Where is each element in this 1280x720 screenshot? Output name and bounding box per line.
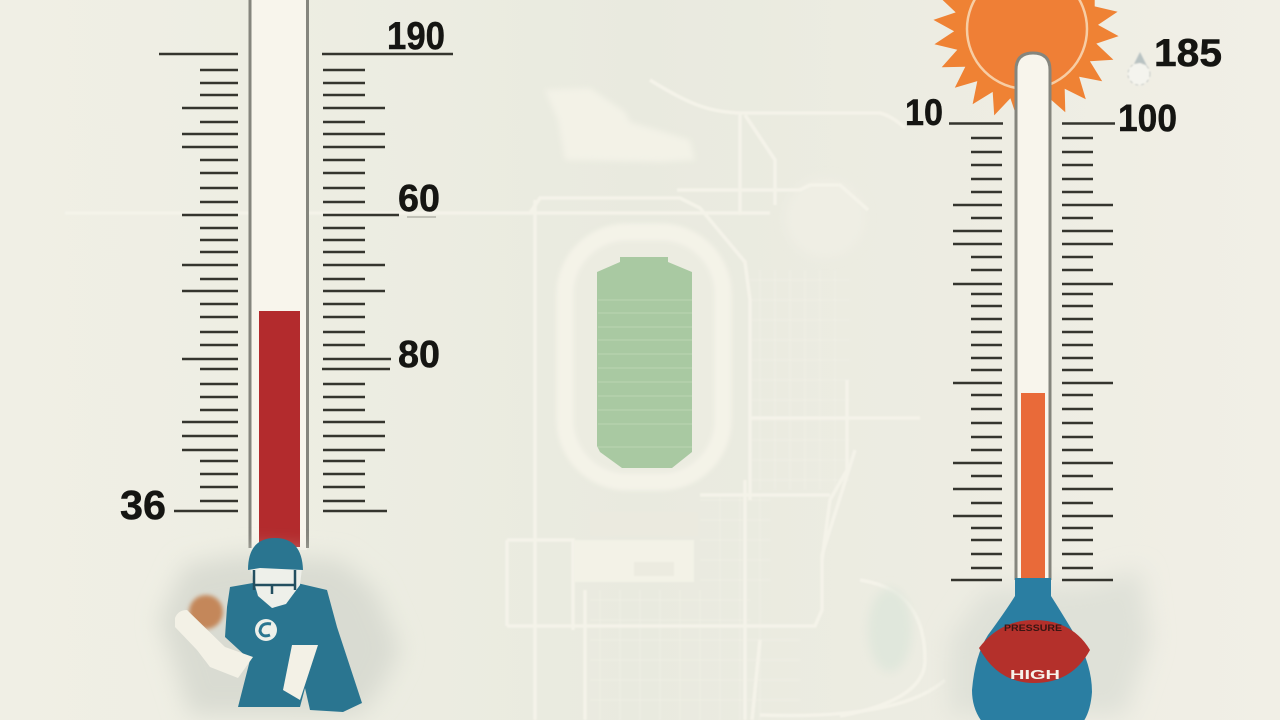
label: 185: 185 <box>1154 32 1222 75</box>
sun disc <box>967 0 1087 89</box>
smudge behind player <box>160 555 400 715</box>
left red fill <box>259 311 300 547</box>
right tube <box>1016 53 1050 580</box>
jersey logo <box>255 619 277 641</box>
face mask <box>254 570 295 594</box>
sun <box>933 0 1119 121</box>
football top text: PRESSURE <box>1004 623 1062 633</box>
jersey <box>225 583 362 712</box>
throwing arm <box>175 610 253 678</box>
face <box>250 568 302 608</box>
right thermometer <box>905 32 1222 720</box>
map: stadium ring <box>565 232 723 482</box>
label: 80: 80 <box>398 334 440 376</box>
label: 190: 190 <box>387 15 445 58</box>
bulb <box>972 578 1092 720</box>
map: stadium field <box>597 257 692 468</box>
label: 100: 100 <box>1118 98 1177 140</box>
football in bulb <box>979 620 1090 683</box>
icon: football player <box>175 538 362 712</box>
right ticks <box>1062 124 1115 580</box>
helmet <box>248 538 303 570</box>
sun rays <box>933 0 1119 121</box>
map: main roads <box>65 80 945 720</box>
map: pale circle <box>785 178 865 258</box>
map: plaza blocks <box>574 512 698 582</box>
stadium map background <box>65 80 945 720</box>
right orange fill <box>1021 393 1045 579</box>
label: 60: 60 <box>398 178 440 220</box>
left ticks <box>949 124 1003 580</box>
football <box>189 595 223 629</box>
smudge behind bulb <box>950 570 1150 715</box>
left ticks <box>159 54 238 511</box>
label: 10: 10 <box>905 92 943 133</box>
left tube <box>250 0 308 550</box>
map: pond <box>868 588 912 672</box>
map: street grid <box>590 270 850 720</box>
football bottom text: HIGH <box>1010 667 1060 682</box>
right ticks <box>322 54 453 511</box>
map: pale blob <box>545 88 695 162</box>
faint tick <box>407 216 436 218</box>
forearm <box>283 645 318 700</box>
neck cover <box>1015 578 1051 584</box>
label: 36: 36 <box>120 482 166 528</box>
icon: faint droplet <box>1128 52 1150 85</box>
left thermometer <box>120 0 453 550</box>
